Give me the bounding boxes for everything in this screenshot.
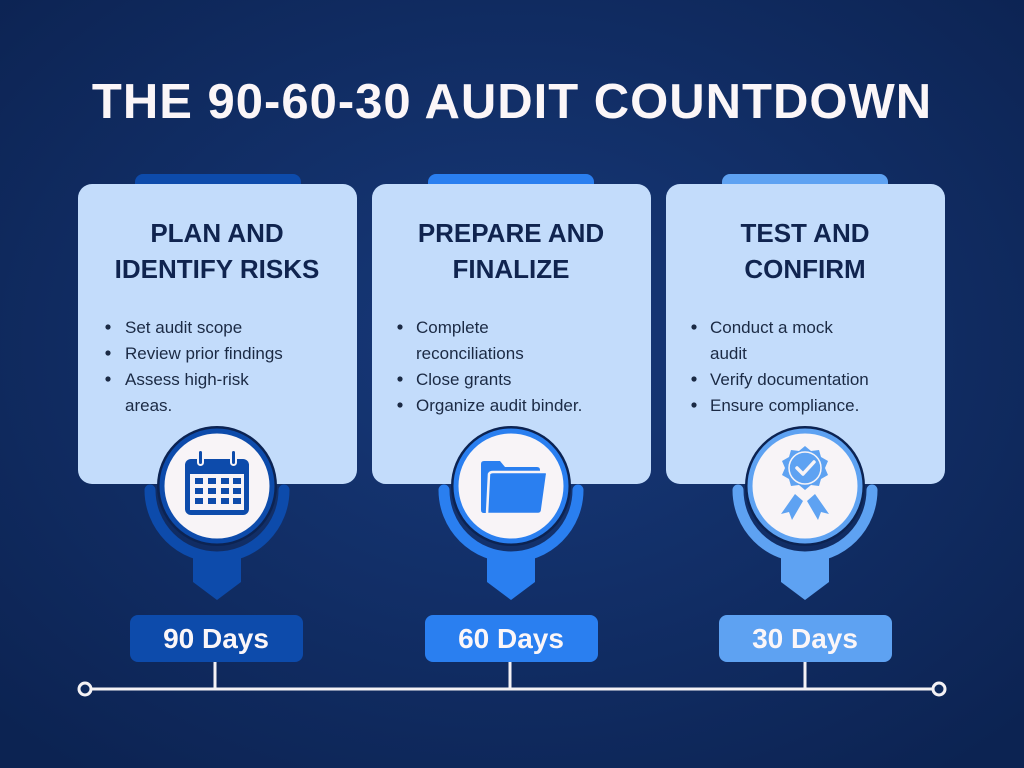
bullets: Close grants	[416, 370, 511, 389]
heading: plan and identify risks: IDENTIFY RISKS	[115, 254, 319, 284]
heading: plan and identify risks: PLAN AND	[150, 218, 284, 248]
bullets: reconciliations	[416, 344, 524, 363]
bullets: Set audit scope	[125, 318, 242, 337]
bullets	[691, 318, 869, 415]
bullets: Organize audit binder.	[416, 396, 582, 415]
bullets: Assess high-risk	[125, 370, 249, 389]
label: 60 days	[425, 615, 598, 662]
title: THE 90-60-30 AUDIT COUNTDOWN	[92, 75, 932, 129]
bullets: audit	[710, 344, 747, 363]
label: 90 days: 90 Days	[163, 623, 269, 654]
icon pin: folder	[444, 426, 578, 600]
heading: prepare and finalize: PREPARE AND	[418, 218, 604, 248]
icon pin: calendar	[150, 426, 284, 600]
bullets: areas.	[125, 396, 172, 415]
timeline	[79, 662, 945, 695]
label: 30 days: 30 Days	[752, 623, 858, 654]
bullets: Verify documentation	[710, 370, 869, 389]
panel: 90 days	[78, 174, 357, 662]
heading: prepare and finalize: FINALIZE	[452, 254, 570, 284]
bullets	[105, 318, 283, 415]
panel: 30 days	[666, 174, 945, 662]
label: 60 days: 60 Days	[458, 623, 564, 654]
bullets	[397, 318, 582, 415]
icon pin: badge	[738, 426, 872, 600]
bullets: Complete	[416, 318, 489, 337]
panel: 60 days	[372, 174, 651, 662]
label: 30 days	[719, 615, 892, 662]
bullets: Conduct a mock	[710, 318, 833, 337]
label: 90 days	[130, 615, 303, 662]
heading: test and confirm: TEST AND	[740, 218, 870, 248]
bullets: Review prior findings	[125, 344, 283, 363]
heading: test and confirm: CONFIRM	[744, 254, 866, 284]
bullets: Ensure compliance.	[710, 396, 859, 415]
